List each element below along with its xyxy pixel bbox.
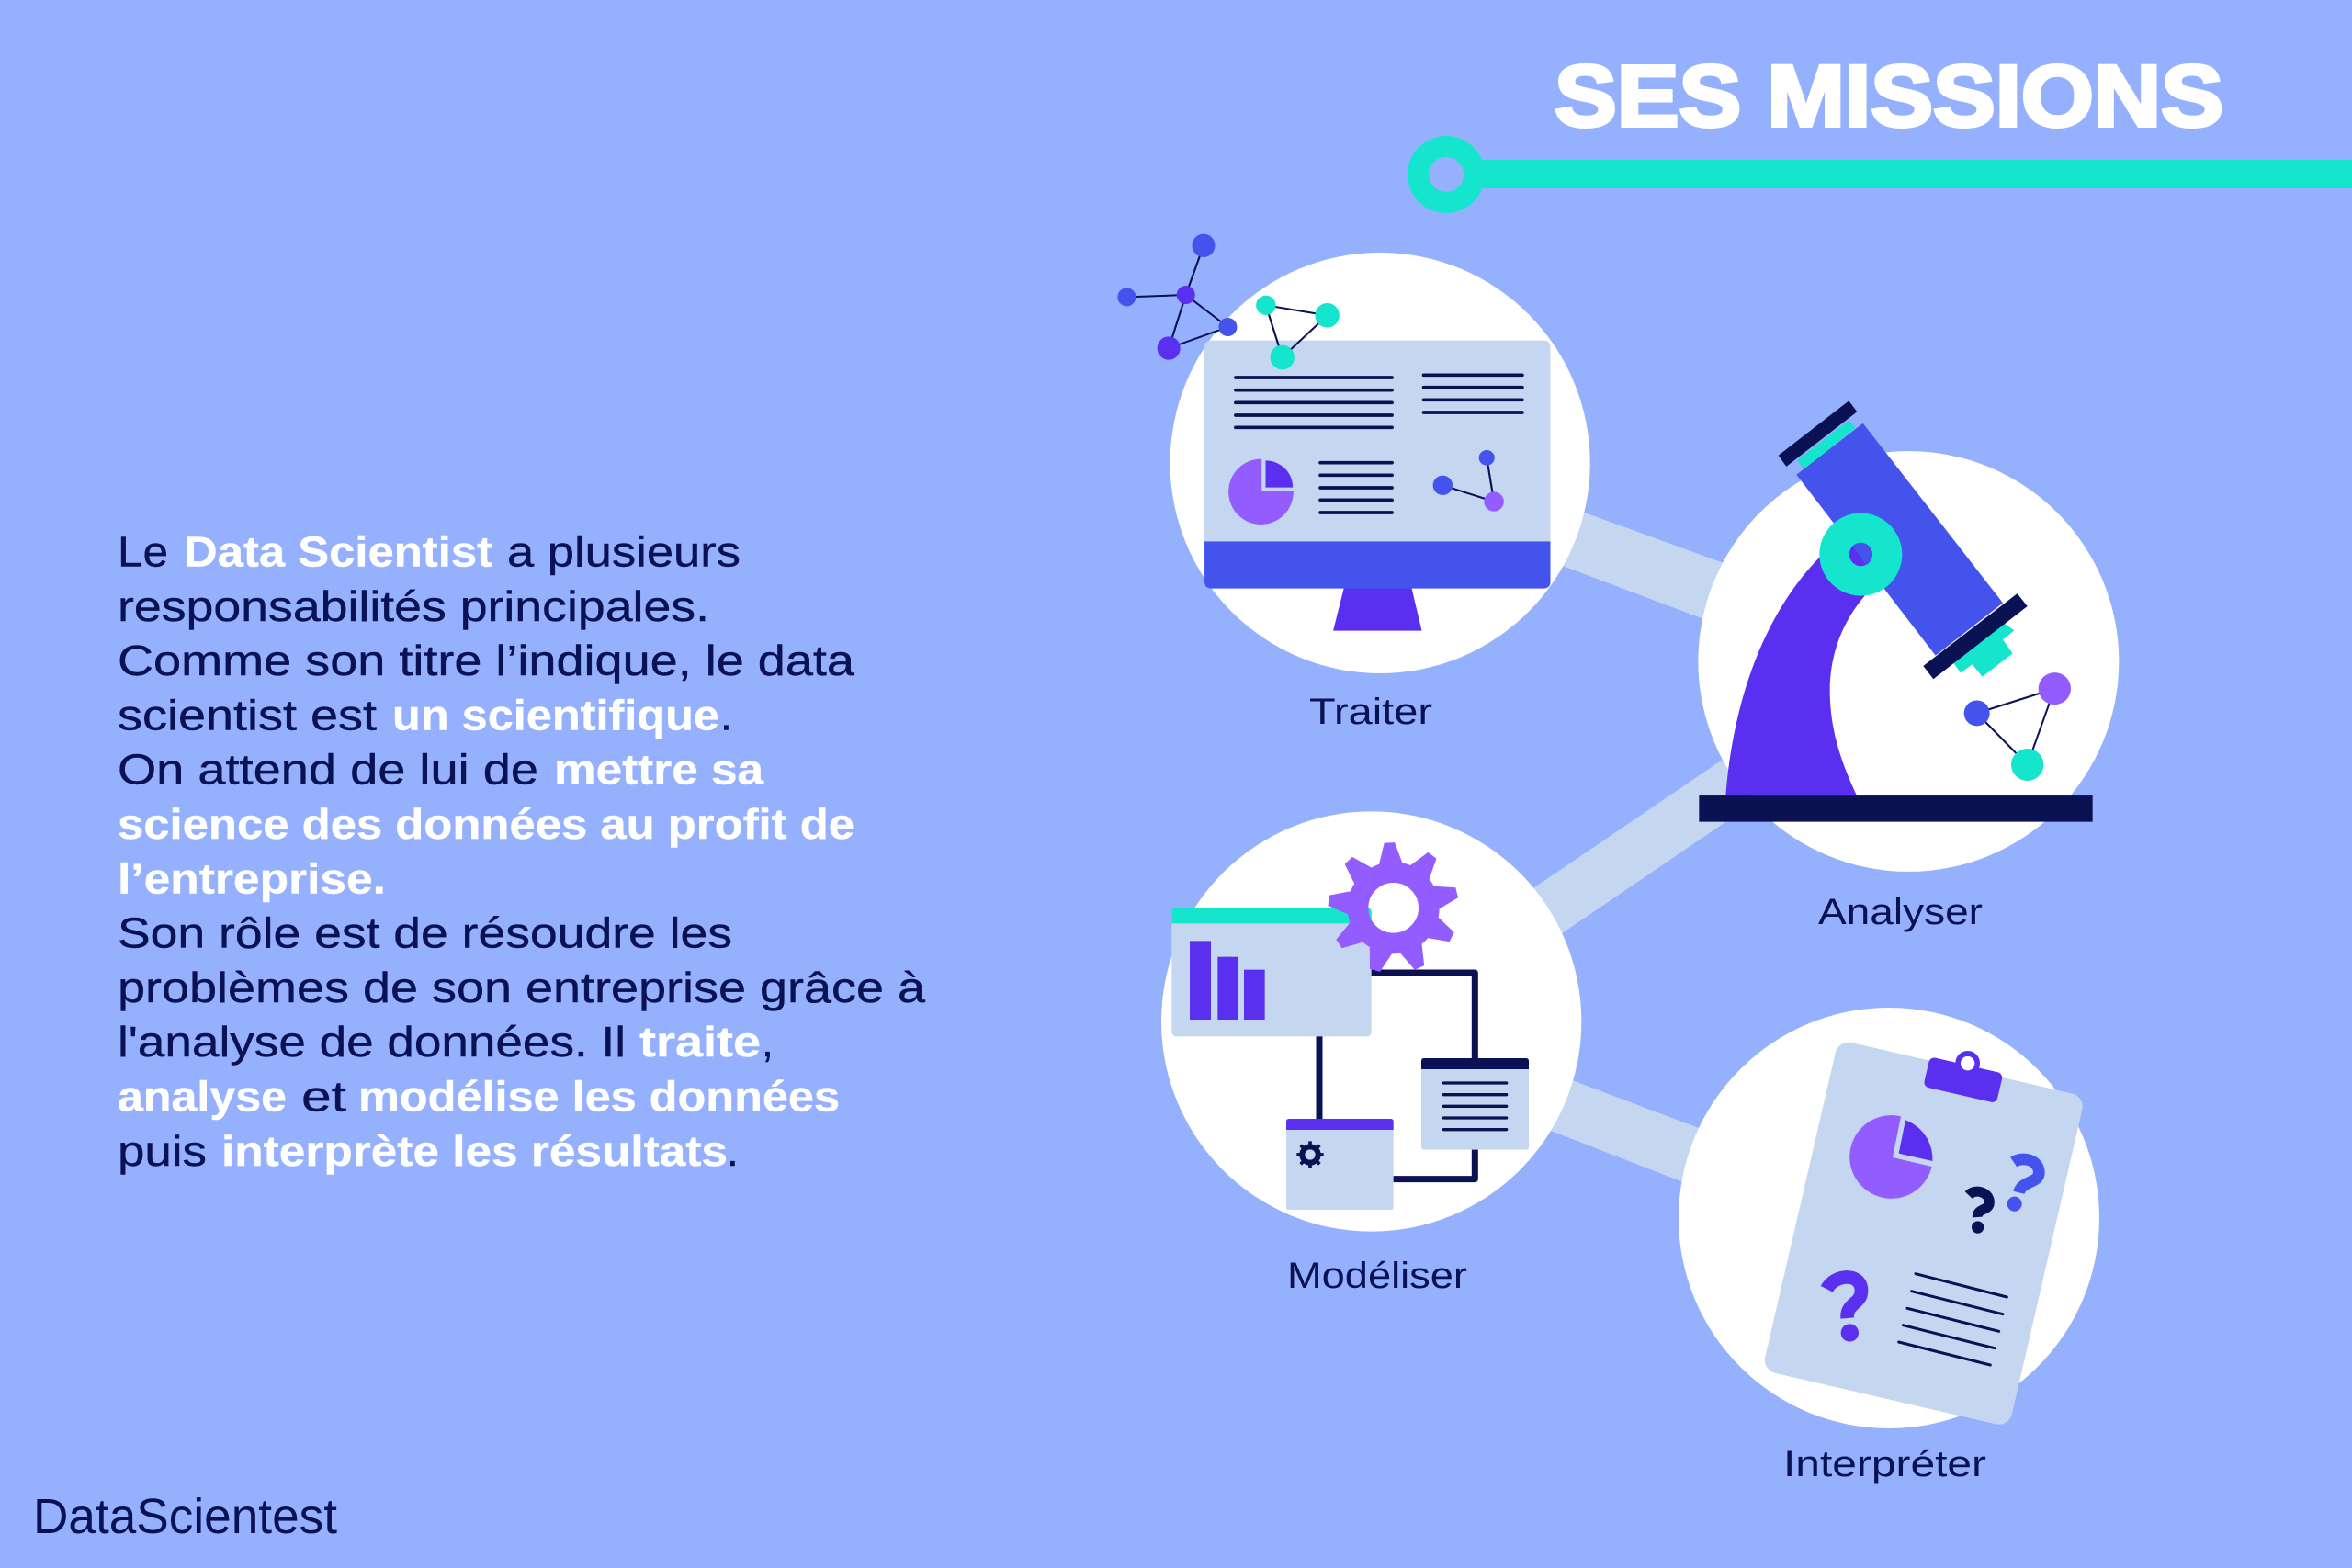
icon: microscope	[1699, 400, 2093, 822]
body text: et	[301, 1073, 346, 1121]
label: interpreter: Interpréter	[1783, 1444, 1986, 1484]
body text: un scientifique	[392, 691, 719, 739]
body text: On attend de lui de	[118, 746, 538, 794]
logo wordmark: DataScientest	[33, 1489, 337, 1544]
body text: Data Scientist	[184, 527, 492, 575]
body text: modélise les données	[358, 1073, 840, 1121]
body text: responsabilités principales.	[118, 582, 709, 630]
label: modeliser: Modéliser	[1287, 1256, 1467, 1296]
icon: large gear	[1328, 842, 1460, 974]
connector: traiter to analyser	[1553, 504, 1736, 621]
label: traiter: Traiter	[1309, 692, 1432, 732]
connector lines	[1319, 973, 1475, 1179]
panel: interpreter	[1679, 1008, 2099, 1428]
body text: science des données au profit de	[118, 800, 854, 848]
body text: Le	[118, 527, 168, 575]
circle backdrop	[1698, 451, 2119, 872]
body text: Son rôle est de résoudre les	[118, 909, 732, 957]
connector: modeliser to interpreter	[1534, 1073, 1713, 1187]
title rule with ring	[1419, 147, 2352, 202]
panel: modeliser	[1161, 811, 1581, 1232]
icon: clipboard	[1762, 1040, 2086, 1427]
icon: chart window	[1171, 908, 1372, 1036]
body text: traite	[639, 1018, 761, 1066]
body text: .	[720, 691, 732, 739]
body text: ,	[762, 1018, 774, 1066]
circle backdrop	[1170, 253, 1590, 673]
circle backdrop	[1679, 1008, 2099, 1428]
icon: blue molecule	[1117, 234, 1237, 360]
circle backdrop	[1161, 811, 1581, 1232]
body text: puis	[118, 1127, 207, 1175]
body text: mettre sa	[554, 746, 763, 794]
icon: settings window	[1286, 1119, 1394, 1210]
body text: scientist est	[118, 691, 377, 739]
body text: l'analyse de données. Il	[118, 1018, 626, 1066]
body text	[118, 527, 925, 1175]
icon: molecule under lens	[1964, 672, 2071, 781]
title: SES MISSIONS	[1555, 48, 2223, 145]
icon: monitor	[1204, 341, 1550, 631]
body text: Comme son titre l’indique, le data	[118, 637, 854, 684]
label: analyser: Analyser	[1818, 892, 1983, 932]
body text: analyse	[118, 1073, 287, 1121]
panel: analyser	[1698, 400, 2119, 872]
body text: problèmes de son entreprise grâce à	[118, 964, 925, 1011]
icon: teal molecule	[1256, 296, 1340, 369]
body text: l’entreprise.	[118, 854, 386, 902]
connector: analyser to modeliser	[1525, 753, 1746, 940]
body text: interprète les résultats	[221, 1127, 728, 1175]
body text: .	[727, 1127, 739, 1175]
panel: traiter	[1117, 234, 1590, 673]
body text: a plusieurs	[507, 527, 741, 575]
icon: text window	[1421, 1058, 1529, 1150]
